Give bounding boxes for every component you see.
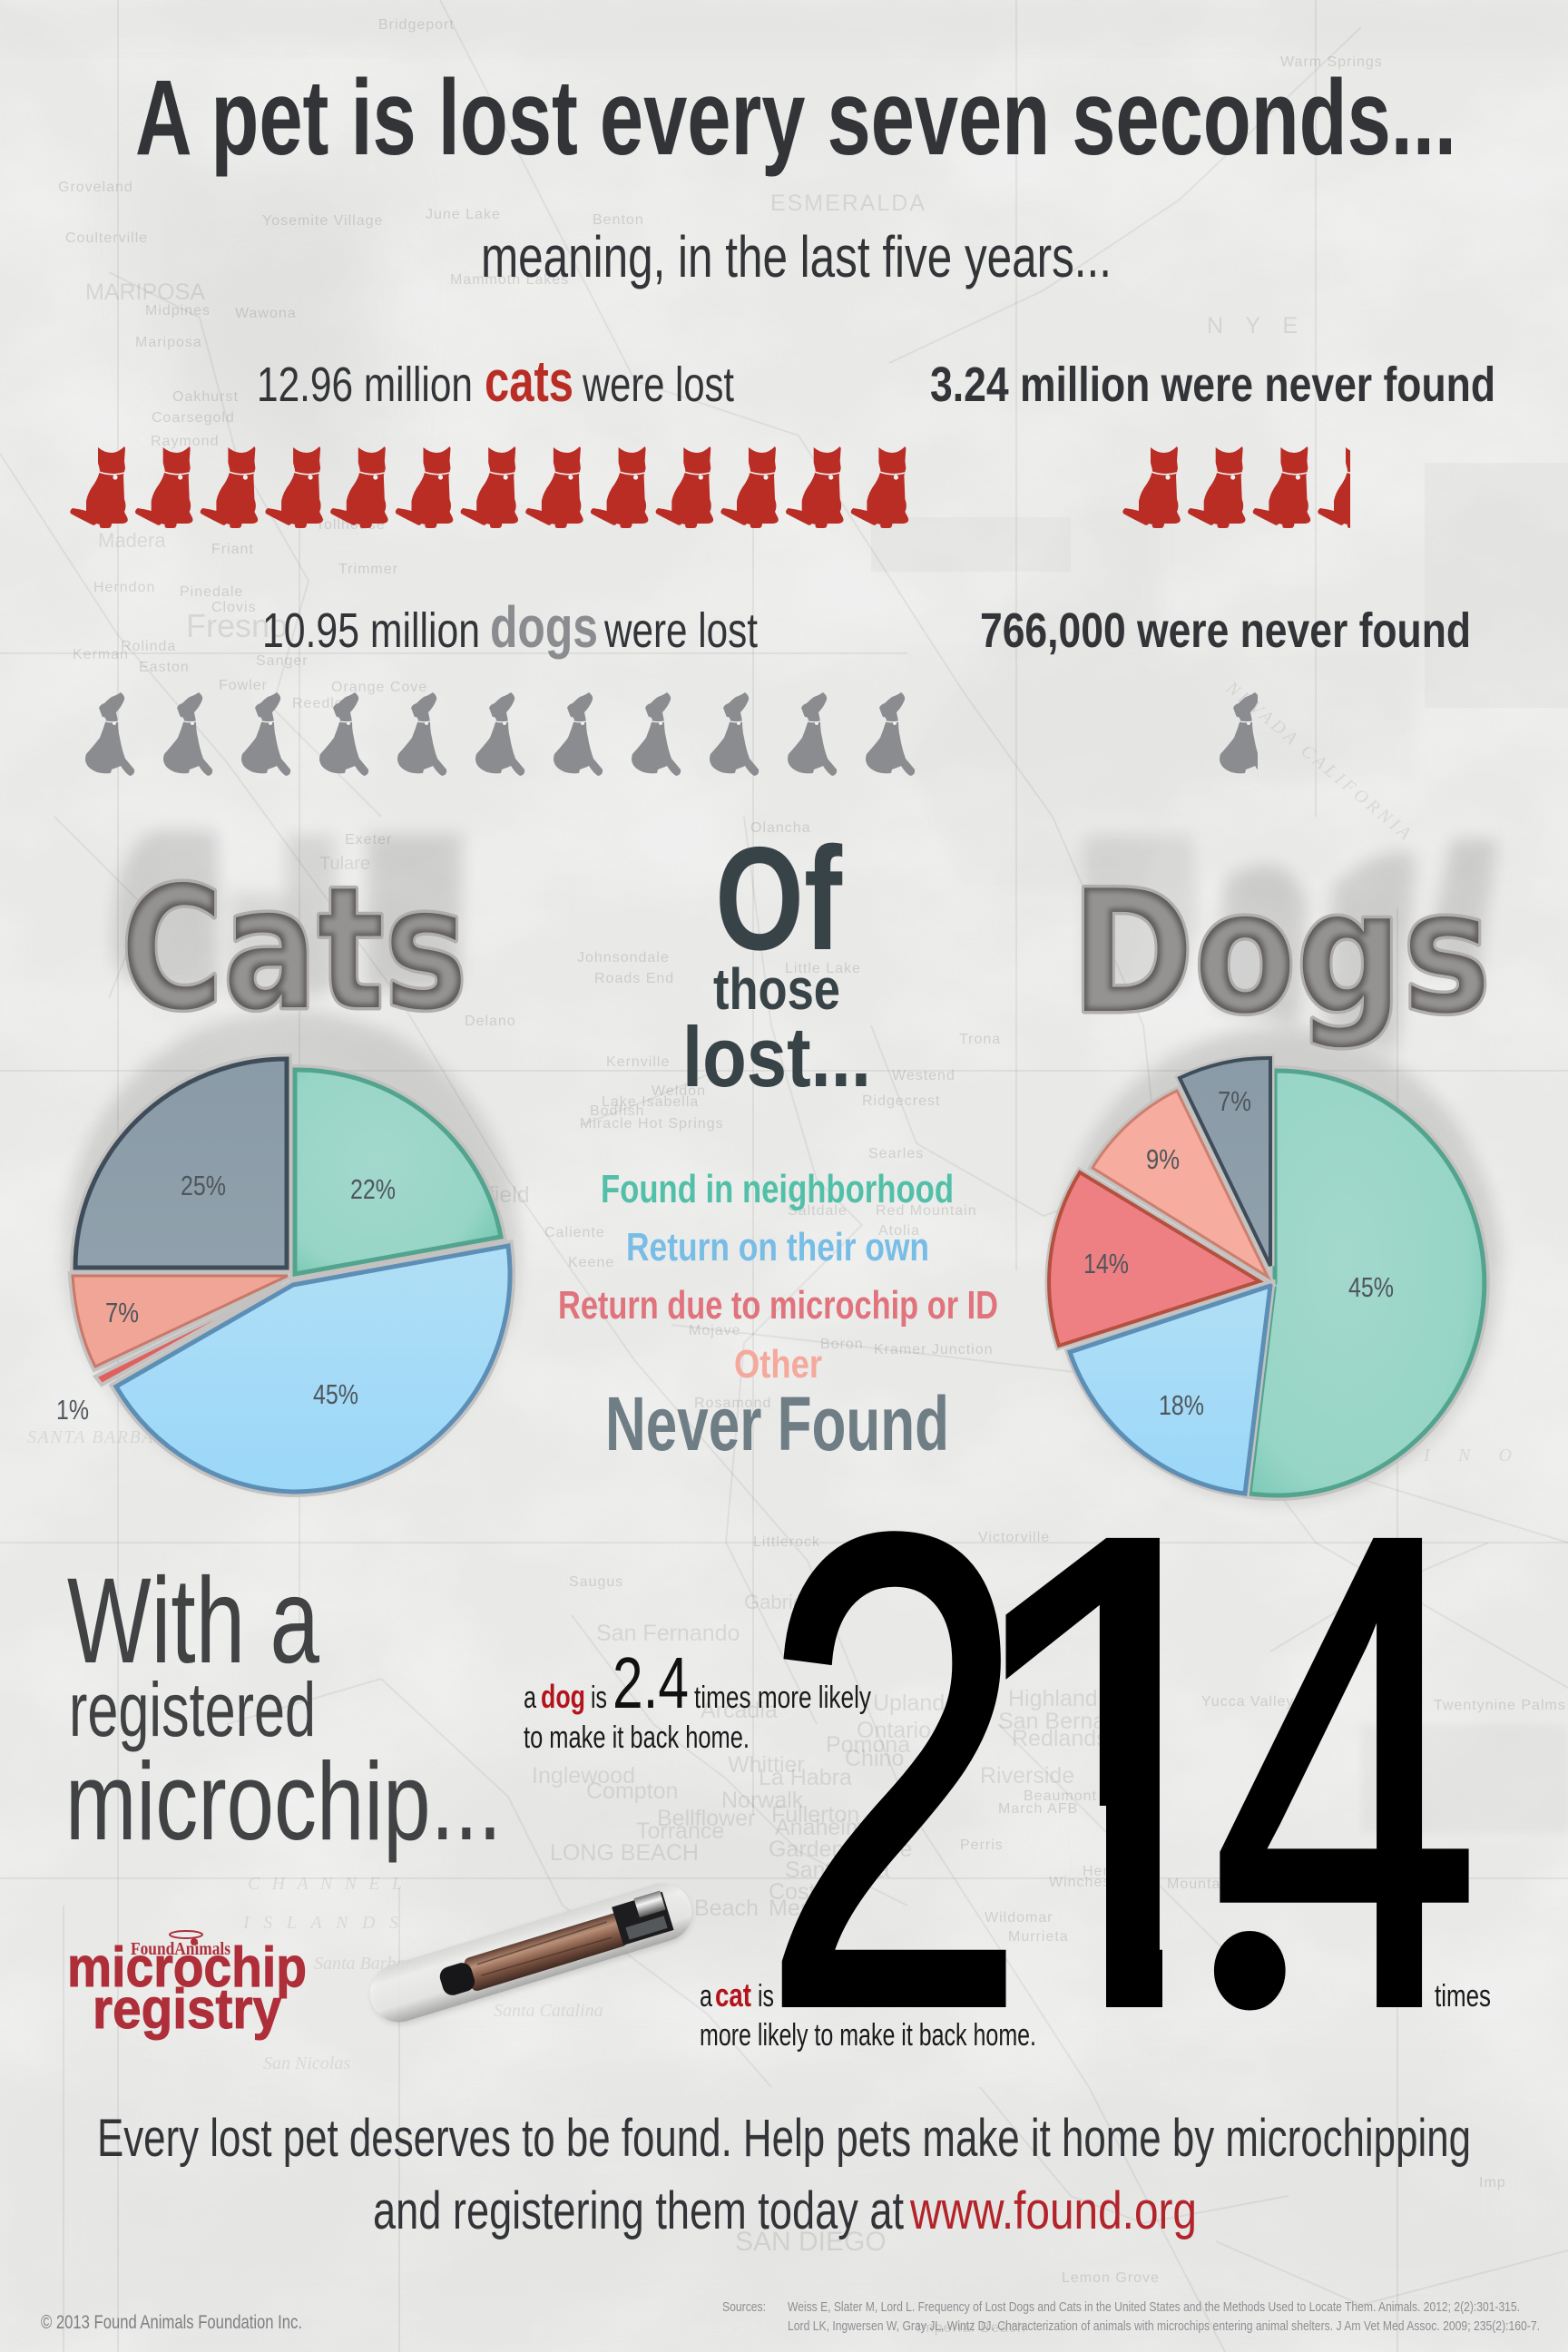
- background map: Whittier: [728, 1752, 805, 1778]
- legend: [558, 1167, 998, 1466]
- background map: Mammoth Lakes: [450, 272, 569, 288]
- background map: Oakhurst: [172, 389, 239, 405]
- background map: Santa Catalina: [494, 2001, 603, 2021]
- background map: La Habra: [759, 1765, 852, 1790]
- big number 21.4: [782, 1531, 1469, 2011]
- panel: dogs chart: [1049, 835, 1500, 1504]
- background map: Fullerton: [771, 1802, 859, 1828]
- background map: Miracle Hot Springs: [580, 1116, 724, 1132]
- cats heading: Cats: [121, 850, 467, 1047]
- background map: Tollhouse: [316, 517, 386, 533]
- background map: Trimmer: [338, 562, 398, 577]
- slice: other 9%: [1093, 1091, 1268, 1277]
- background map: Ontario: [857, 1718, 931, 1743]
- panel: of those lost heading: those: [713, 956, 840, 1022]
- dog statistic: times more likely: [694, 1681, 871, 1715]
- background map: SANTA BARBARA: [27, 1427, 181, 1447]
- slice: found in neighborhood 22%: [295, 1070, 501, 1274]
- dogs heading shadow: [1084, 835, 1497, 1053]
- dogs never found heading: 766,000 were never found: [980, 603, 1471, 658]
- background map: Groveland: [58, 180, 133, 195]
- logo: found animals microchip registry: FoundAnimals: [131, 1939, 230, 1959]
- background map: Pinedale: [180, 584, 243, 600]
- background map: Kerman: [73, 647, 129, 662]
- background map: Chino: [845, 1746, 904, 1771]
- background map: Beach: [694, 1896, 759, 1921]
- background map: Coulterville: [65, 230, 148, 246]
- background map: Beaumont: [1024, 1788, 1097, 1804]
- background map: Imp: [1479, 2175, 1506, 2190]
- with a registered microchip heading: With a: [67, 1553, 319, 1689]
- dog statistic: is: [591, 1681, 607, 1715]
- cats lost heading: cats: [485, 348, 573, 414]
- background map: Victorville: [978, 1530, 1050, 1545]
- slice: never found 7%: 7%: [1218, 1085, 1251, 1117]
- background map: Red Mountain: [876, 1203, 977, 1219]
- background map: Benton: [593, 212, 644, 228]
- background map: Mesa: [769, 1896, 824, 1921]
- slice: found in neighborhood 45%: [1250, 1071, 1485, 1495]
- background map: Rolinda: [121, 639, 176, 654]
- slice: microchip 14%: [1049, 1172, 1259, 1346]
- with a registered microchip heading: registered: [69, 1667, 316, 1752]
- dogs pie shadow: [1055, 1028, 1500, 1504]
- background map: Kernville: [606, 1054, 670, 1070]
- background map: Torrance: [636, 1818, 724, 1844]
- background map: Friant: [211, 542, 254, 557]
- background map: Orange Cove: [331, 680, 427, 695]
- background map: San Fernando: [596, 1621, 740, 1646]
- background map: Yucca Valley: [1201, 1694, 1294, 1710]
- legend: Return due to microchip or ID: [558, 1283, 998, 1328]
- icon: never found dog: [1220, 692, 1258, 773]
- icon row: 11 grey dogs: [85, 692, 915, 776]
- cats heading: Cats: [121, 850, 467, 1047]
- panel: of those lost heading: [682, 817, 871, 1104]
- background map: Lake Isabella: [602, 1094, 699, 1110]
- cat statistic: is: [758, 1979, 774, 2014]
- dog statistic: to make it back home.: [524, 1720, 750, 1755]
- background map: Santa Ana: [785, 1857, 889, 1883]
- background map: NEVADA CALIFORNIA: [1221, 677, 1417, 846]
- dog statistic: [524, 1642, 871, 1755]
- dogs lost heading: were lost: [603, 603, 758, 658]
- background map: Winchester: [1049, 1875, 1131, 1890]
- panel: of those lost heading: Of: [715, 817, 843, 981]
- logo: found animals microchip registry: microchip: [67, 1936, 307, 1999]
- dogs lost heading: [262, 594, 758, 660]
- call to action: [97, 2109, 1471, 2240]
- icon row: never found cats: [1122, 446, 1376, 528]
- background map: Rosamond: [694, 1396, 771, 1411]
- with a registered microchip heading: microchip...: [65, 1740, 502, 1863]
- background map: Sanger: [256, 653, 309, 669]
- background map: Weldon: [652, 1083, 706, 1099]
- background map: Ridgecrest: [862, 1093, 940, 1109]
- dogs heading: Dogs: [1071, 854, 1491, 1051]
- background map: Lemon Grove: [1062, 2270, 1160, 2286]
- legend: Never Found: [605, 1381, 949, 1466]
- background map: Delano: [465, 1014, 516, 1029]
- background map: CHANNEL: [248, 1874, 406, 1894]
- slice: never found 7%: [1180, 1058, 1270, 1266]
- cat statistic: cat: [715, 1976, 751, 2014]
- background map: Gabriel: [744, 1591, 808, 1613]
- background map: Coarsegold: [152, 410, 235, 426]
- background map: Yosemite Village: [262, 213, 383, 229]
- copyright: © 2013 Found Animals Foundation Inc.: [41, 2312, 302, 2333]
- background map: Westend: [892, 1068, 956, 1083]
- big number 21.4: 4: [1211, 1396, 1480, 2146]
- slice: found in neighborhood 22%: 22%: [350, 1173, 396, 1205]
- cats lost heading: 12.96 million: [257, 358, 473, 412]
- subtitle: meaning, in the last five years...: [481, 224, 1112, 289]
- logo: found animals microchip registry: [67, 1931, 307, 2041]
- slice: microchip 14%: 14%: [1083, 1248, 1129, 1279]
- background map: Mountain Center: [1167, 1877, 1288, 1892]
- background map: Anaheim: [775, 1815, 865, 1840]
- call to action: and registering them today at: [373, 2181, 904, 2240]
- background map: Raymond: [151, 434, 219, 449]
- background map: Mojave: [689, 1323, 741, 1338]
- background map: Inglewood: [532, 1763, 635, 1788]
- cats heading shadow: [113, 830, 463, 998]
- background map: Saltdale: [788, 1203, 848, 1219]
- background map: ESMERALDA: [770, 191, 925, 216]
- background map: Trona: [959, 1032, 1001, 1047]
- dogs pie chart: [1049, 1058, 1485, 1495]
- background map: Bakersfield: [417, 1182, 530, 1208]
- background map: Highland: [1008, 1686, 1098, 1711]
- background map: Clark Mtn: [1252, 1114, 1328, 1134]
- cat statistic: [700, 1976, 1491, 2053]
- dog statistic: dog: [541, 1678, 585, 1715]
- background map: San Nicolas: [263, 2053, 350, 2073]
- slice: never found 25%: 25%: [181, 1170, 226, 1201]
- background map: Wawona: [235, 306, 297, 321]
- background map: RDINO: [1342, 1446, 1515, 1465]
- big number 21.4: .: [1174, 1404, 1326, 2147]
- background map: Fresno: [186, 607, 288, 644]
- with a registered microchip heading: [65, 1553, 502, 1863]
- cats lost heading: [257, 348, 734, 414]
- background map: Murrieta: [1008, 1929, 1069, 1945]
- cats lost heading: were lost: [582, 358, 734, 412]
- background map: Compton: [586, 1779, 678, 1804]
- background map: ISLANDS: [242, 1913, 402, 1933]
- background map: Herndon: [93, 580, 155, 595]
- slice: return on their own 18%: [1070, 1286, 1270, 1494]
- slice: return on their own 18%: 18%: [1159, 1389, 1204, 1421]
- background map: Santa Barbara: [314, 1954, 421, 1974]
- sources: [722, 2299, 1540, 2334]
- background map: March AFB: [998, 1801, 1078, 1817]
- background map: Reedley: [292, 696, 352, 711]
- big number 21.4: 1: [951, 1396, 1287, 2147]
- slice: found in neighborhood 45%: 45%: [1348, 1271, 1394, 1303]
- slice: return on their own 45%: 45%: [313, 1378, 358, 1410]
- background map: Hemet: [1083, 1864, 1130, 1879]
- dogs lost heading: dogs: [490, 594, 598, 660]
- slice: other 7%: 7%: [105, 1297, 139, 1328]
- cat statistic: times: [1435, 1979, 1491, 2014]
- slice: microchip 1%: [95, 1285, 281, 1385]
- background map: Mariposa: [135, 335, 202, 350]
- background map: Warm Springs: [1280, 54, 1383, 70]
- dog statistic: a: [524, 1681, 536, 1715]
- background map: Little Lake: [785, 961, 861, 976]
- cats pie chart: [73, 1059, 510, 1492]
- background map: Bellflower: [657, 1806, 755, 1831]
- background map: Searles: [868, 1146, 924, 1161]
- sources: Sources:: [722, 2299, 766, 2315]
- background map: Costa: [769, 1879, 828, 1905]
- cats pie shadow: [65, 1010, 519, 1485]
- dog statistic: 2.4: [612, 1642, 689, 1723]
- background map: SAN DIEGO: [735, 2227, 887, 2257]
- background map: Madera: [98, 529, 166, 552]
- background map: Riverside: [980, 1763, 1074, 1788]
- background map: Perris: [960, 1838, 1004, 1853]
- background map: Wildomar: [985, 1910, 1054, 1926]
- background map: Saugus: [569, 1574, 623, 1590]
- background map: NYE: [1207, 313, 1298, 338]
- background map: Exeter: [345, 832, 392, 848]
- background map: Caliente: [544, 1225, 605, 1240]
- legend: Other: [734, 1342, 822, 1387]
- panel: cats chart: [56, 830, 519, 1492]
- slice: other 7%: [73, 1276, 288, 1367]
- panel: of those lost heading: lost...: [682, 1009, 871, 1104]
- background map: Arcadia: [701, 1698, 778, 1723]
- background map: Johnsondale: [577, 950, 670, 965]
- background map: Easton: [139, 660, 190, 675]
- background map: Pomona: [826, 1732, 910, 1758]
- background map: Upland: [873, 1690, 945, 1716]
- background map: Bodfish: [590, 1103, 644, 1119]
- slice: never found 25%: [75, 1059, 287, 1268]
- background map: Bridgeport: [378, 17, 455, 33]
- background map: Boron: [820, 1337, 864, 1352]
- dogs heading: Dogs: [1071, 854, 1491, 1051]
- dogs lost heading: 10.95 million: [262, 603, 480, 658]
- cat statistic: a: [700, 1979, 712, 2014]
- background map: Olancha: [750, 820, 811, 836]
- big number 21.4: 2: [760, 1397, 1027, 2147]
- microchip photo: [363, 1877, 700, 2031]
- background map: Tulare: [319, 854, 370, 874]
- background map: Imperial Beach: [916, 2320, 1026, 2336]
- background map: Twentynine Palms: [1434, 1698, 1566, 1713]
- background map: Midpines: [145, 303, 211, 318]
- slice: return on their own 45%: [116, 1246, 510, 1492]
- background map: Littlerock: [753, 1534, 820, 1550]
- call to action: www.found.org: [909, 2181, 1197, 2240]
- background map: Roads End: [594, 971, 674, 986]
- background map: Keene: [568, 1255, 614, 1270]
- background map: San Bernardino: [998, 1709, 1156, 1734]
- background map: Fowler: [219, 678, 268, 693]
- icon row: 13 red cats: [70, 446, 908, 528]
- background map: LONG BEACH: [550, 1840, 699, 1866]
- background map: MARIPOSA: [85, 279, 205, 305]
- legend: Found in neighborhood: [601, 1167, 954, 1211]
- cat statistic: more likely to make it back home.: [700, 2018, 1036, 2053]
- background map: Redlands: [1012, 1726, 1108, 1751]
- background map: Norwalk: [721, 1788, 804, 1813]
- label: 1%: 1%: [56, 1394, 89, 1426]
- legend: Return on their own: [626, 1225, 929, 1269]
- logo: found animals microchip registry: registry: [93, 1978, 281, 2041]
- background map: Kramer Junction: [874, 1342, 993, 1357]
- slice: other 9%: 9%: [1146, 1143, 1180, 1175]
- background map: Atolia: [878, 1223, 920, 1239]
- background map: June Lake: [426, 207, 501, 222]
- background map: Garden Grove: [769, 1837, 912, 1862]
- background map: Clovis: [211, 600, 257, 615]
